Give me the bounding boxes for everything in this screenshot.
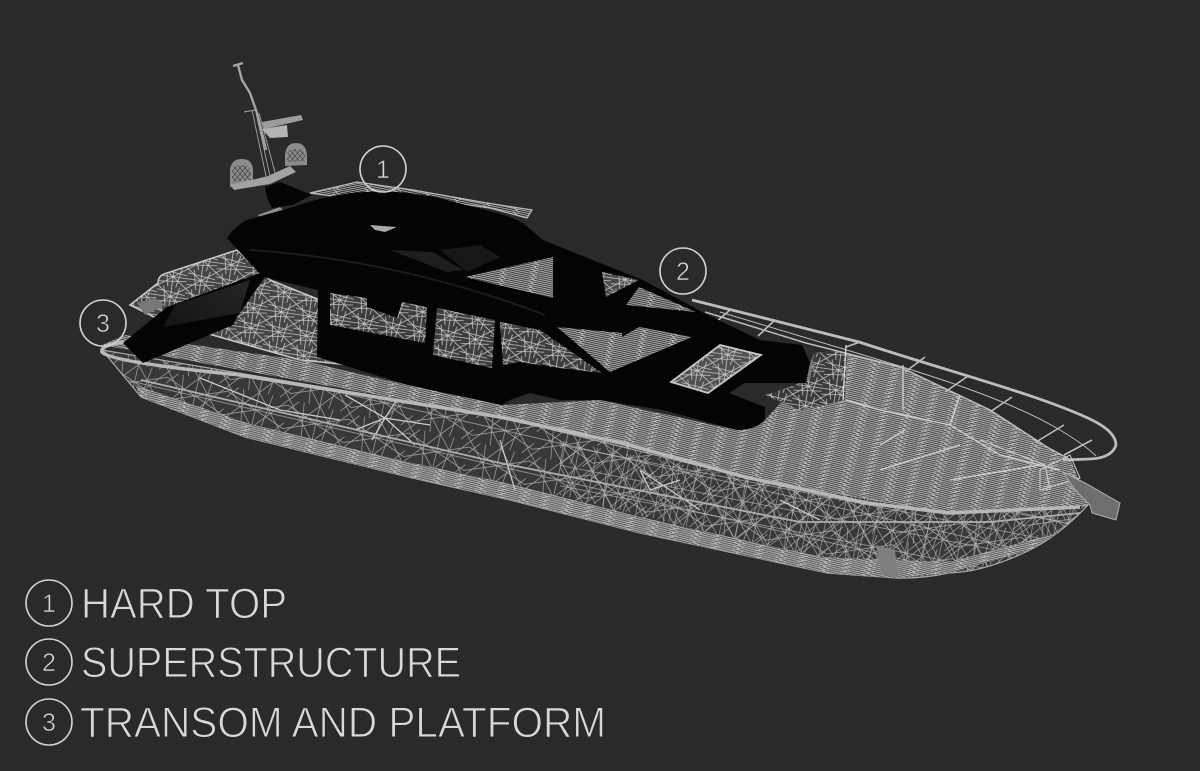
legend item: superstructure: [26, 639, 461, 687]
callout 3: [80, 300, 126, 346]
main deck stripes: [102, 335, 1088, 513]
deck hatch: [671, 345, 761, 393]
callout ring 3: [80, 300, 126, 346]
side window B: [433, 308, 495, 368]
roof highlight left: [390, 250, 463, 272]
radar unit: [262, 125, 288, 138]
roof highlight right: [440, 245, 500, 272]
stern cushion: [137, 298, 165, 315]
foredeck dark pulpit: [692, 300, 1116, 460]
upper strip window: [626, 287, 696, 312]
seating outlines: [843, 345, 1060, 480]
side window B mesh: [433, 308, 495, 368]
cockpit triangles: [765, 350, 847, 410]
inner rail: [705, 312, 1071, 460]
legend ring 2: [26, 639, 72, 685]
mast and antennas: [230, 63, 307, 190]
callout number 2: 2: [676, 258, 690, 286]
hull lower band stripes: [135, 385, 1060, 578]
legend number 1: 1: [42, 590, 56, 618]
side window C: [500, 322, 602, 373]
left dome lattice: [232, 165, 251, 182]
callout number 1: 1: [376, 156, 390, 184]
cockpit mesh: [765, 350, 847, 410]
upper triangle window: [602, 272, 639, 297]
mid rail: [720, 312, 1096, 456]
superstructure black frame: [227, 182, 810, 430]
legend text 3: TRANSOM AND PLATFORM: [80, 699, 606, 747]
mast: [233, 63, 276, 176]
callout 1: [360, 146, 406, 192]
side window A: [330, 293, 427, 343]
roof wire rim: [258, 182, 532, 220]
roof hatch: [370, 225, 397, 232]
legend number 2: 2: [42, 649, 56, 677]
legend text 2: SUPERSTRUCTURE: [81, 639, 461, 687]
hull star details: [200, 378, 820, 520]
callout ring 2: [660, 248, 706, 294]
hull lower band: [135, 385, 1060, 578]
hull side triangles: [102, 350, 1088, 578]
hull bow fine triangles: [560, 440, 1088, 573]
rim right: [310, 182, 532, 218]
superstructure body: [227, 192, 810, 430]
right dome: [285, 143, 307, 166]
bow fitting: [1063, 472, 1120, 520]
rail ribs: [716, 310, 1092, 455]
keel highlight: [876, 545, 898, 577]
main deck base: [102, 335, 1088, 513]
yacht wireframe illustration: [102, 63, 1120, 578]
main gunwale rail: [102, 342, 1080, 513]
callout 2: [660, 248, 706, 294]
left dome: [230, 159, 253, 187]
left dome shell: [230, 159, 253, 187]
front side window: [557, 327, 692, 372]
right dome shell: [285, 143, 307, 166]
upper triangle mesh: [602, 272, 639, 297]
aft upper deck wire: [130, 250, 500, 380]
legend number 3: 3: [42, 709, 56, 737]
lower chine line: [141, 380, 1080, 522]
outer rail: [692, 300, 1116, 460]
legend ring 1: [26, 580, 72, 626]
legend ring 3: [26, 699, 72, 745]
side window C mesh: [500, 322, 602, 373]
platform slab: [123, 273, 265, 363]
right dome lattice: [287, 149, 305, 162]
exhaust fin: [265, 182, 312, 208]
dome crossbar: [230, 166, 296, 190]
callout ring 1: [360, 146, 406, 192]
platform inset: [163, 280, 250, 327]
legend: [26, 580, 606, 747]
side window A mesh: [330, 293, 427, 343]
front side window mesh: [557, 327, 692, 372]
legend item: hard top: [26, 580, 287, 628]
callout number 3: 3: [96, 310, 110, 338]
windshield mesh: [465, 257, 553, 298]
deck hatch mesh: [671, 345, 761, 393]
legend text 1: HARD TOP: [81, 580, 287, 628]
hull side base: [102, 350, 1088, 578]
transom and platform black panel: [123, 273, 265, 363]
roof sweep line: [250, 250, 545, 315]
upper strip mesh: [626, 287, 696, 312]
cockpit wire: [843, 345, 1080, 490]
aft deck mesh: [130, 250, 500, 380]
windshield wire: [465, 257, 553, 298]
radar bar: [262, 115, 303, 129]
rim left: [258, 207, 285, 220]
legend item: transom and platform: [26, 699, 606, 747]
pulpit rails: [692, 300, 1116, 460]
bow detail: [980, 440, 1080, 490]
